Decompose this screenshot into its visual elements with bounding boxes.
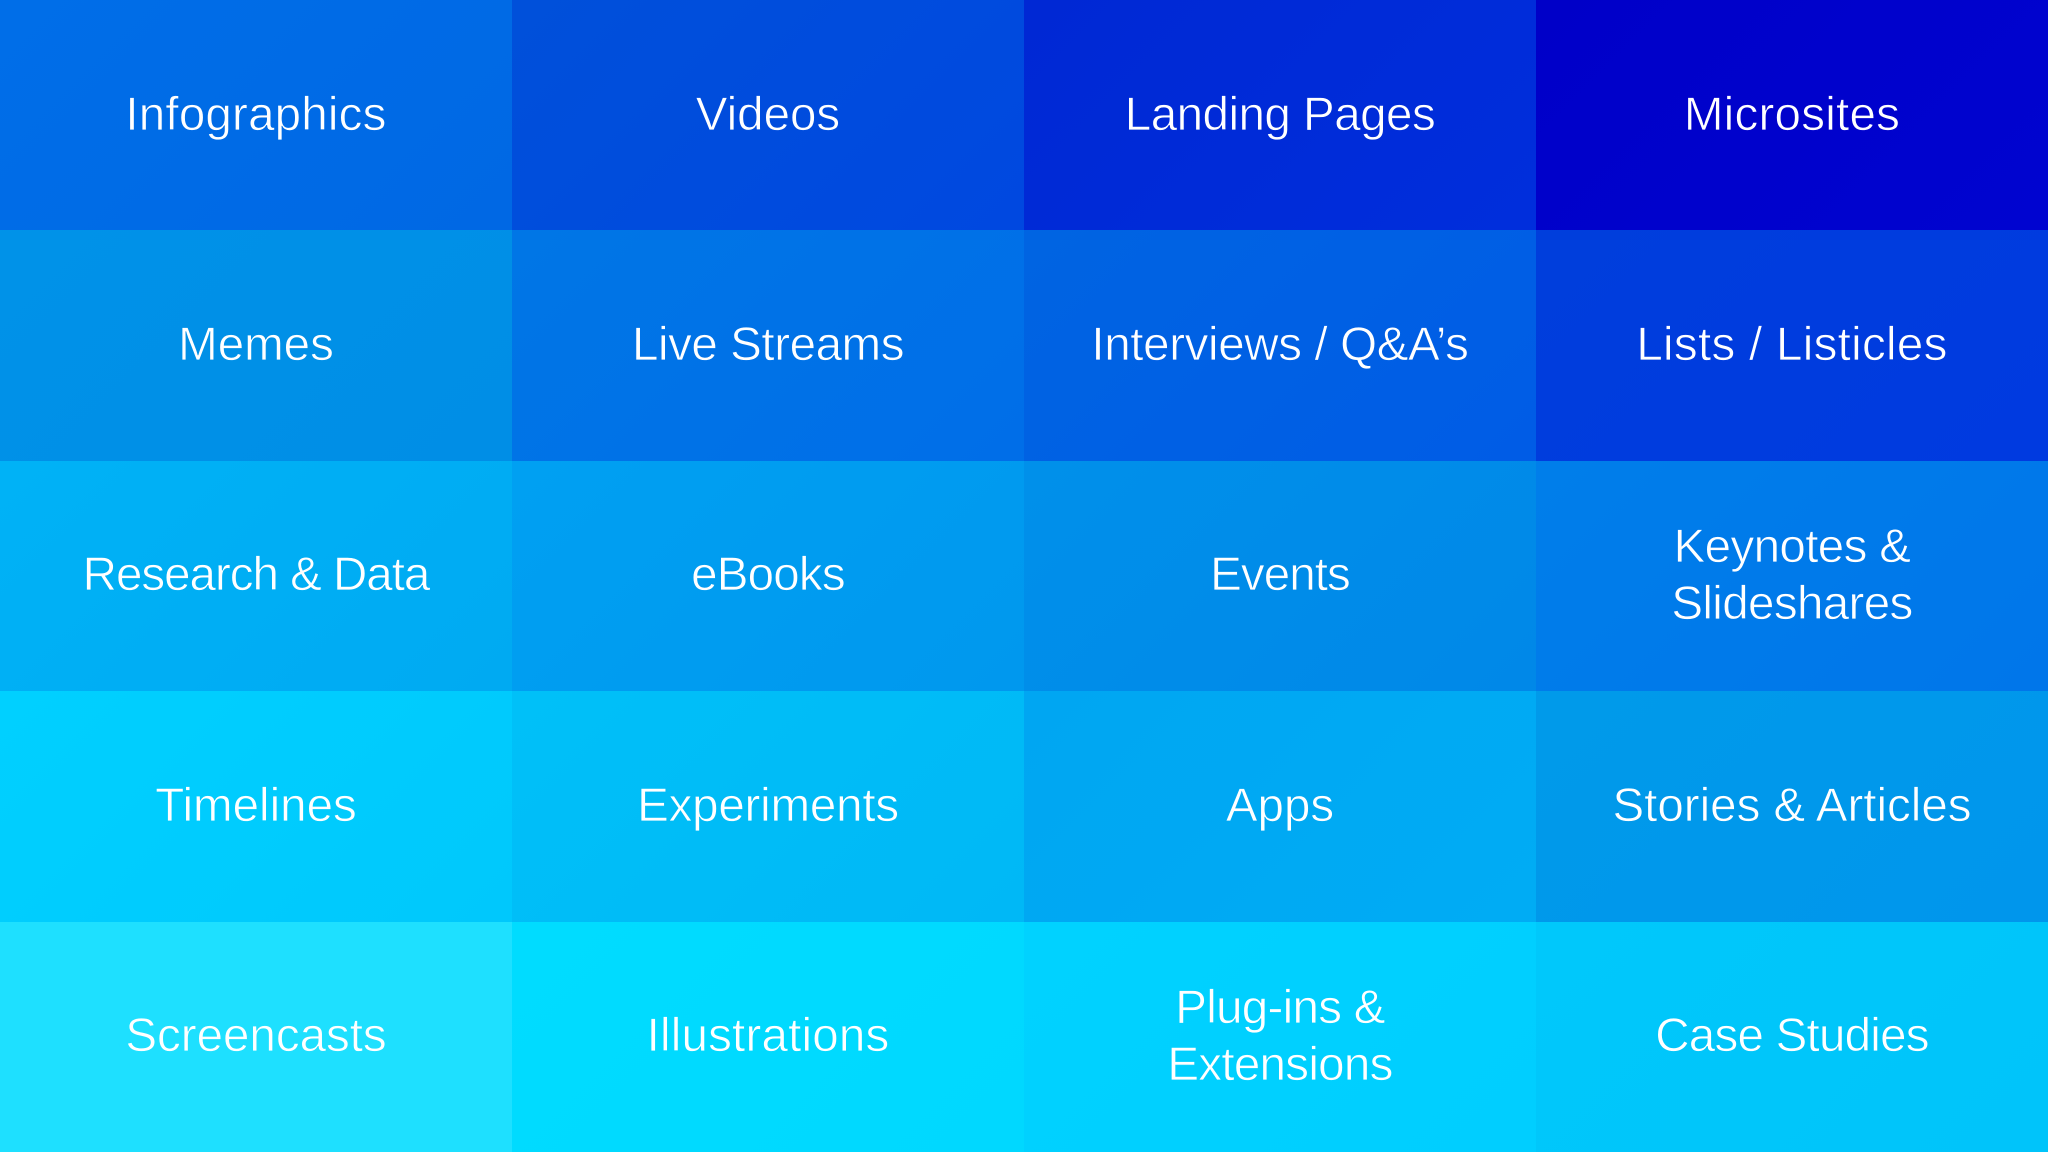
- cell: Illustrations: Illustrations: [647, 1009, 889, 1062]
- cell: Research & Data: [0, 461, 512, 691]
- cell: Plug-ins & Extensions: Extensions: [1167, 1038, 1393, 1091]
- cell: Landing Pages: Landing Pages: [1125, 88, 1435, 141]
- cell: Stories & Articles: Stories & Articles: [1612, 779, 1972, 832]
- cell: Stories & Articles: [1536, 691, 2048, 922]
- cell: Microsites: [1536, 0, 2048, 230]
- cell: Plug-ins & Extensions: [1024, 922, 1536, 1152]
- cell: Infographics: Infographics: [125, 88, 387, 141]
- cell: Landing Pages: [1024, 0, 1536, 230]
- cell: Keynotes & Slideshares: [1536, 461, 2048, 691]
- cell: Experiments: Experiments: [637, 779, 899, 832]
- cell: Case Studies: Case Studies: [1655, 1009, 1929, 1062]
- cell: Keynotes & Slideshares: Slideshares: [1671, 577, 1913, 630]
- cell: Memes: Memes: [178, 318, 334, 371]
- cell: Events: Events: [1210, 548, 1350, 601]
- cell: Research & Data: Research & Data: [83, 548, 429, 601]
- cell: Memes: [0, 230, 512, 461]
- cell: Live Streams: [512, 230, 1024, 461]
- cell: Videos: [512, 0, 1024, 230]
- cell: Experiments: [512, 691, 1024, 922]
- cell: Case Studies: [1536, 922, 2048, 1152]
- cell: Illustrations: [512, 922, 1024, 1152]
- cell: Apps: [1024, 691, 1536, 922]
- cell: eBooks: eBooks: [691, 548, 845, 601]
- cell: Apps: Apps: [1226, 779, 1334, 832]
- cell: Infographics: [0, 0, 512, 230]
- cell: Events: [1024, 461, 1536, 691]
- cell: Videos: Videos: [696, 88, 840, 141]
- cell: Microsites: Microsites: [1684, 88, 1900, 141]
- cell: Keynotes & Slideshares: Keynotes &: [1674, 520, 1910, 573]
- cell: Plug-ins & Extensions: Plug-ins &: [1175, 981, 1385, 1034]
- cell: Timelines: Timelines: [155, 779, 357, 832]
- cell: Screencasts: [0, 922, 512, 1152]
- cell: Screencasts: Screencasts: [125, 1009, 387, 1062]
- cell: Lists / Listicles: Lists / Listicles: [1636, 318, 1948, 371]
- cell: Interviews / Q&A's: [1024, 230, 1536, 461]
- cell: Timelines: [0, 691, 512, 922]
- cell: Interviews / Q&A's: Interviews / Q&A’s: [1091, 318, 1469, 371]
- cell: eBooks: [512, 461, 1024, 691]
- cell: Live Streams: Live Streams: [632, 318, 904, 371]
- cell: Lists / Listicles: [1536, 230, 2048, 461]
